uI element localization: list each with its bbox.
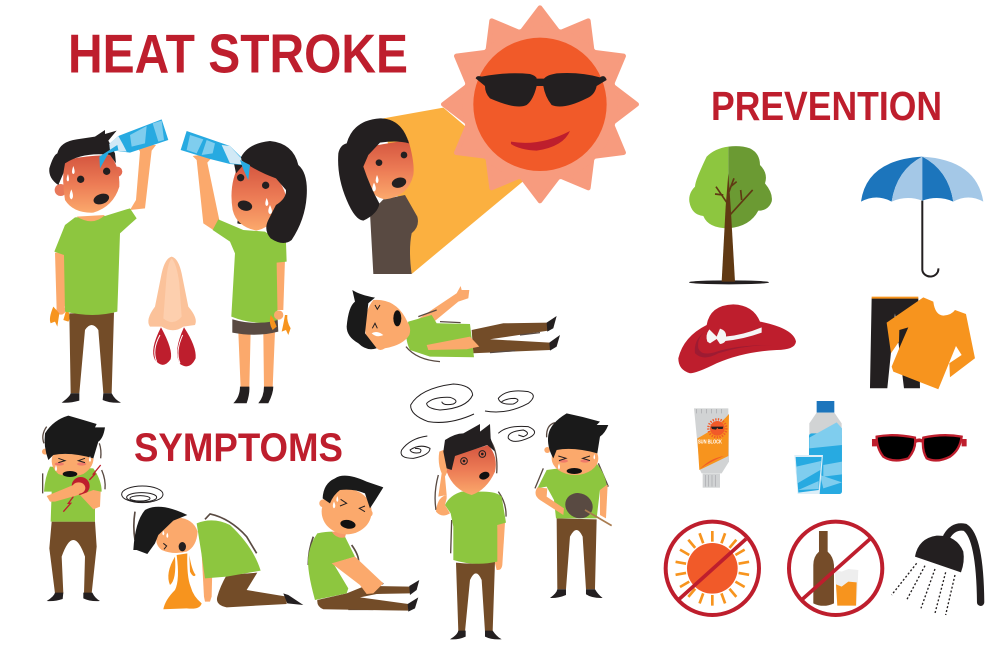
woman in sunlight [338, 118, 418, 274]
heading: symptoms: SYMPTOMS [134, 426, 343, 470]
symptom: dizzy man with spirals [401, 384, 535, 639]
icon: water bottle and glass [794, 401, 842, 494]
icon: red sun hat [678, 304, 796, 373]
symptom: man sitting holding his leg [308, 476, 419, 612]
icon: bleeding nose [148, 257, 196, 366]
symptom: man vomiting [122, 486, 303, 609]
icon: no alcohol [789, 522, 882, 615]
icon: sunblock tube: SUN BLOCK [698, 439, 722, 445]
symptom: man with stomach pain [535, 413, 612, 598]
woman pouring water over head [181, 131, 307, 403]
symptom: man with chest pain [42, 416, 105, 601]
sun with sunglasses and sunlight beam [383, 8, 637, 274]
man lying on the ground [347, 286, 560, 362]
icon: no sun exposure [666, 522, 759, 615]
icon: umbrella [861, 157, 983, 277]
icon: sunblock tube [694, 408, 729, 488]
man pouring water over head [49, 119, 168, 403]
icon: long-sleeve shirt and trousers [870, 297, 975, 389]
heading: prevention: PREVENTION [711, 83, 942, 129]
icon: red sunglasses [872, 435, 967, 460]
title: heat stroke: HEAT STROKE [68, 22, 408, 84]
icon: tree [689, 146, 772, 284]
icon: shower [892, 527, 981, 615]
dizziness spirals [401, 384, 535, 458]
